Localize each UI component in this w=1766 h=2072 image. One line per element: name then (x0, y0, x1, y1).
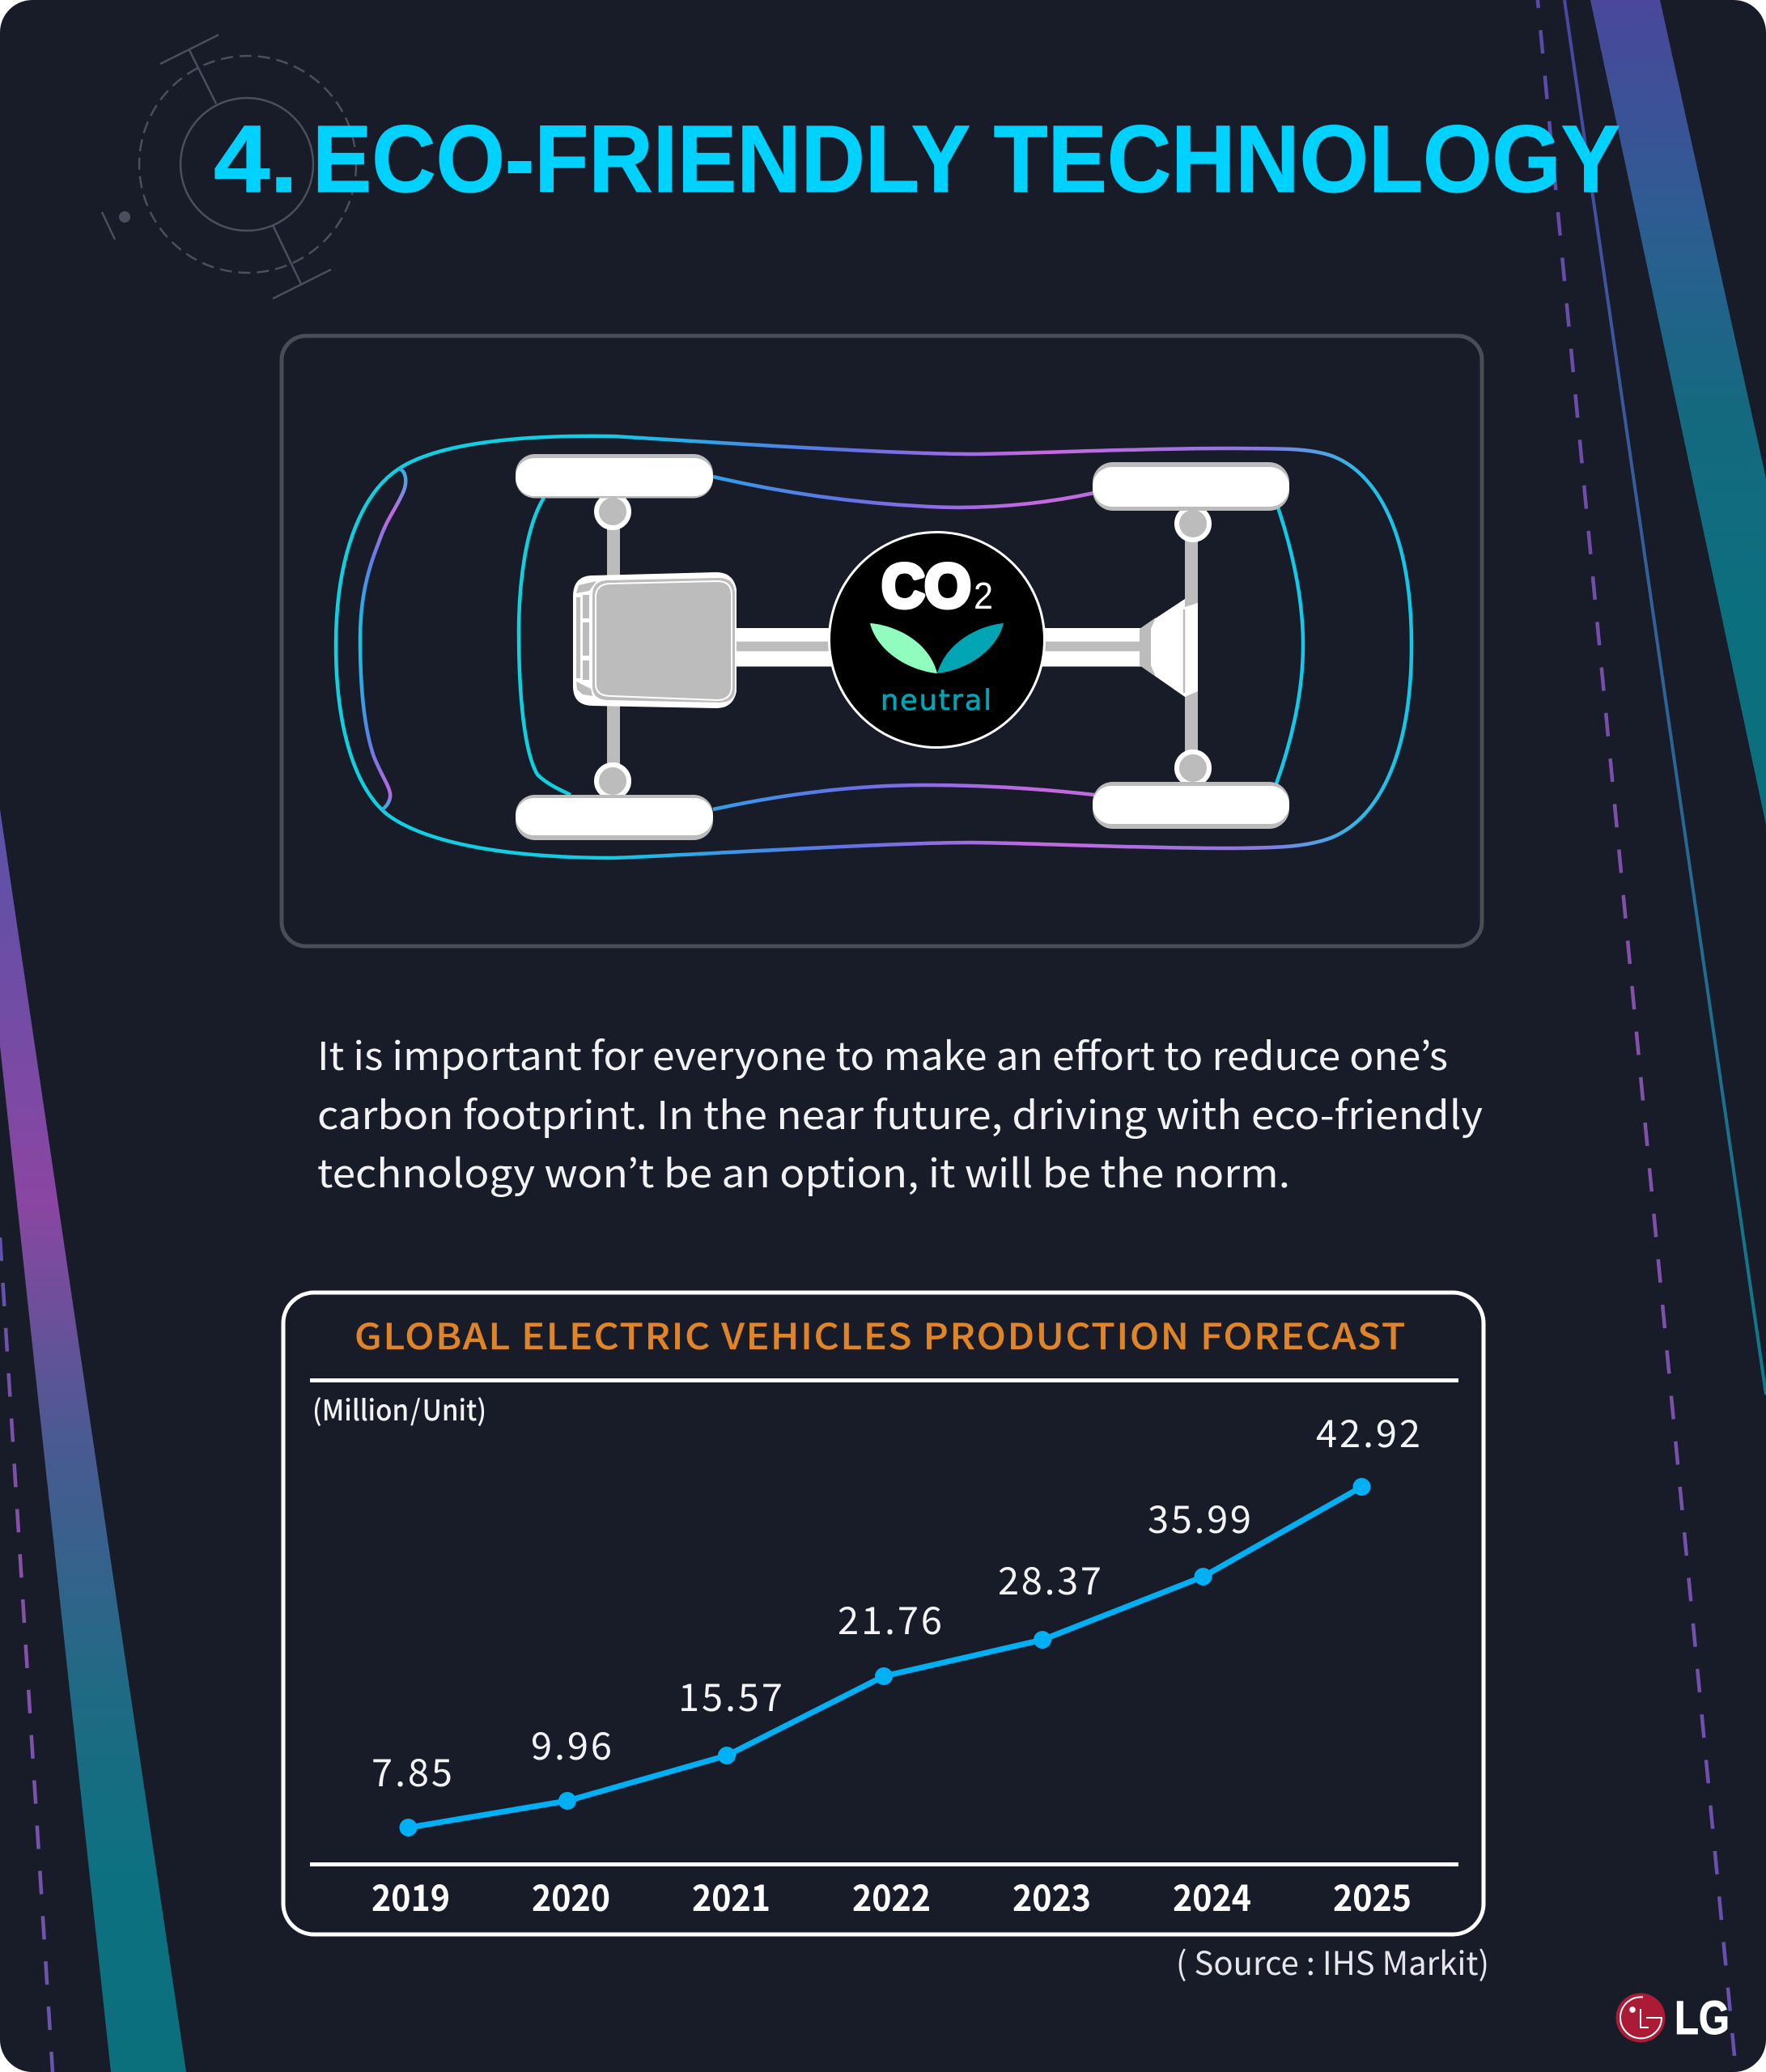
title: ECO-FRIENDLY TECHNOLOGY (312, 106, 1620, 213)
year labels: 2023 (1012, 1869, 1091, 1921)
panel: EV production forecast chart (283, 1293, 1484, 1934)
rear axle (607, 518, 620, 777)
CO2 neutral badge: neutral (881, 685, 991, 717)
right thin line (1564, 0, 1766, 1395)
CO2 neutral badge: CO (882, 552, 971, 620)
year labels: 2024 (1173, 1869, 1251, 1921)
lower cabin line (713, 785, 1094, 809)
year labels: 2021 (692, 1869, 771, 1921)
year labels (371, 1869, 1412, 1921)
chart frame (283, 1293, 1484, 1934)
year labels: 2025 (1333, 1869, 1412, 1921)
battery unit (573, 572, 737, 708)
tyre front bottom (1093, 782, 1289, 829)
body text: carbon footprint. In the near future, driving with eco-friendly (317, 1084, 1483, 1140)
left diagonal gradient band (0, 809, 186, 2072)
tyre front top (1093, 462, 1289, 511)
year labels: 2022 (852, 1869, 931, 1921)
body text: technology won’t be an option, it will be the norm. (317, 1142, 1290, 1199)
body text: It is important for everyone to make an effort to reduce one’s (317, 1025, 1448, 1081)
front axle (1185, 526, 1198, 769)
LG logo: LG (1675, 1992, 1730, 2044)
hubs (596, 495, 1209, 797)
windshield line (360, 469, 405, 809)
car body outline (336, 436, 1412, 858)
drive shaft (732, 628, 1145, 667)
LG logo (1615, 1992, 1730, 2044)
data values: 35.99 (1148, 1488, 1251, 1544)
data values: 7.85 (371, 1742, 452, 1798)
unit label: (Million / Unit) (312, 1388, 486, 1429)
year labels: 2019 (371, 1869, 450, 1921)
data values: 15.57 (678, 1667, 783, 1722)
line series (400, 1478, 1371, 1836)
upper cabin line (713, 477, 1094, 507)
source note: ( Source : IHS Markit) (1176, 1938, 1489, 1985)
icon: LG circle (1615, 1993, 1666, 2043)
data values (371, 1403, 1420, 1798)
data values: 21.76 (838, 1590, 942, 1645)
panel frame (282, 336, 1482, 946)
left dashed line (0, 1238, 53, 2072)
icon: right leaf (937, 623, 1004, 673)
data values: 28.37 (998, 1550, 1102, 1606)
right dashed line (1536, 0, 1734, 2056)
decorative wheel ornament (102, 35, 356, 299)
CO2 neutral badge: 2 (974, 575, 993, 617)
axis rule (310, 1862, 1458, 1866)
data values: 42.92 (1316, 1403, 1420, 1458)
title: 4. (214, 106, 298, 213)
title rule (310, 1378, 1458, 1382)
data values: 9.96 (531, 1715, 612, 1771)
tyre rear top (516, 454, 713, 499)
chart title: GLOBAL ELECTRIC VEHICLES PRODUCTION FORECAST (354, 1308, 1407, 1360)
tyre rear bottom (516, 795, 713, 840)
icon: left leaf (870, 623, 937, 673)
rear inner line (519, 498, 571, 795)
right diagonal gradient band (1590, 0, 1766, 825)
year labels: 2020 (532, 1869, 610, 1921)
front inner line (1276, 507, 1303, 783)
body text (317, 1025, 1483, 1199)
CO2 neutral badge (829, 533, 1044, 748)
panel: car chassis illustration (282, 336, 1482, 946)
differential (1140, 599, 1198, 697)
